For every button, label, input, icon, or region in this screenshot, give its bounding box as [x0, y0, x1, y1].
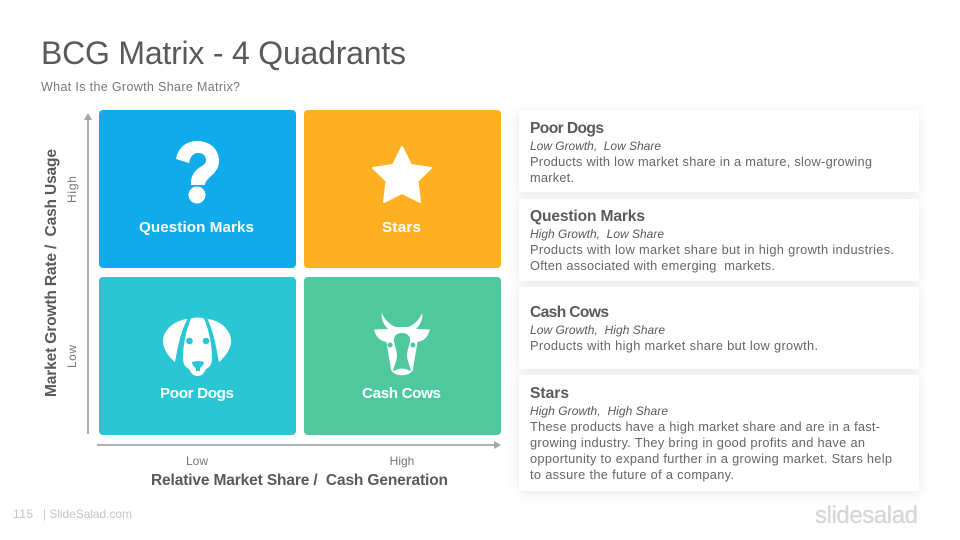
- label: poor dogs: Poor Dogs: [160, 385, 234, 402]
- panel: cash cows description: [519, 287, 919, 369]
- title: BCG Matrix - 4 Quadrants: [41, 35, 406, 71]
- y axis label: low: Low: [65, 345, 79, 368]
- label: stars: Stars: [382, 219, 421, 236]
- label: cash cows: Cash Cows: [362, 385, 441, 402]
- subheading: poor dogs: Low Growth, Low Share: [530, 139, 661, 153]
- x axis label: high: High: [390, 454, 414, 468]
- footer: site name: | SlideSalad.com: [43, 507, 132, 521]
- y axis label: high: High: [65, 176, 79, 203]
- panel: stars description: [519, 375, 919, 491]
- y axis title: Market Growth Rate / Cash Usage: [43, 149, 60, 397]
- body: poor dogs: [530, 154, 872, 185]
- arrow: horizontal axis: [97, 441, 501, 449]
- quadrant: cash cows: [304, 277, 501, 435]
- quadrant: stars: [304, 110, 501, 268]
- panel: BCG matrix: [99, 110, 501, 435]
- heading: question marks: Question Marks: [530, 208, 645, 225]
- body: stars: opportunity to expand further in a growing market. Stars help: [530, 451, 892, 466]
- body: poor dogs: market.: [530, 170, 574, 185]
- label: question marks: Question Marks: [139, 219, 254, 236]
- body: stars: [530, 419, 892, 482]
- body: stars: These products have a high market share and are in a fast-: [530, 419, 880, 434]
- quadrant: poor dogs: [99, 277, 296, 435]
- subheading: question marks: High Growth, Low Share: [530, 227, 664, 241]
- arrow: vertical axis: [84, 113, 92, 434]
- x axis label: low: Low: [186, 454, 208, 468]
- quadrant: question marks: [99, 110, 296, 268]
- x axis title: Relative Market Share / Cash Generation: [151, 472, 448, 489]
- heading: stars: Stars: [530, 385, 569, 402]
- heading: poor dogs: Poor Dogs: [530, 120, 604, 137]
- logo: slidesalad: slidesalad: [815, 502, 918, 529]
- body: question marks: Often associated with emerging markets.: [530, 258, 775, 273]
- panel: poor dogs description: [519, 110, 919, 192]
- icon: star: [373, 147, 431, 202]
- body: question marks: Products with low market share but in high growth industries.: [530, 242, 894, 257]
- icon: cow: [374, 313, 430, 375]
- footer: page number: 115: [13, 507, 33, 521]
- heading: cash cows: Cash Cows: [530, 304, 609, 321]
- body: cash cows: Products with high market share but low growth.: [530, 338, 818, 353]
- body: stars: growing industry. They bring in good profits and have an: [530, 435, 865, 450]
- icon: question mark: [176, 141, 219, 204]
- body: question marks: [530, 242, 894, 273]
- panel: question marks description: [519, 199, 919, 281]
- subheading: cash cows: Low Growth, High Share: [530, 323, 665, 337]
- body: stars: to assure the future of a company.: [530, 467, 734, 482]
- icon: dog: [163, 318, 231, 376]
- subtitle: What Is the Growth Share Matrix?: [41, 80, 240, 94]
- subheading: stars: High Growth, High Share: [530, 404, 668, 418]
- body: poor dogs: Products with low market share in a mature, slow-growing: [530, 154, 872, 169]
